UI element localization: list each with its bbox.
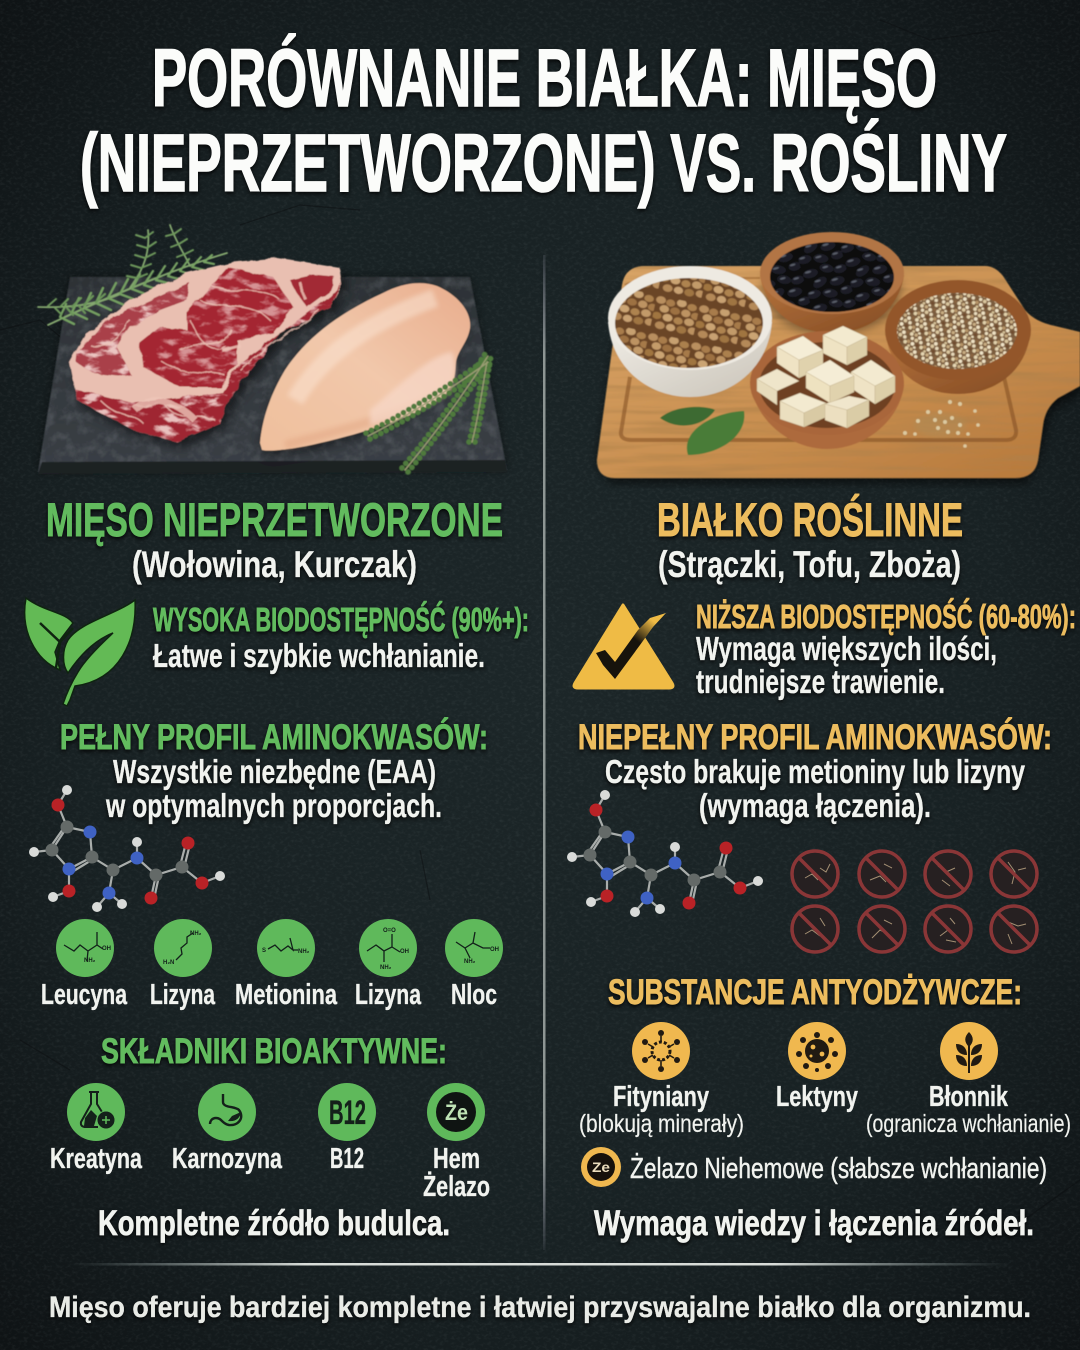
amino: nloc: Nloc bbox=[451, 979, 497, 1011]
text: high bioavailability: WYSOKA BIODOSTĘPNOŚĆ (90%+): bbox=[153, 601, 529, 638]
text: full amino profile bbox=[60, 717, 488, 824]
amino: lysine: H₂N bbox=[163, 960, 174, 966]
heading: unprocessed meat: MIĘSO NIEPRZETWORZONE bbox=[46, 493, 503, 546]
text: incomplete amino profile bbox=[578, 717, 1052, 824]
rosemary bbox=[38, 225, 227, 325]
icon: warning triangle with check bbox=[574, 605, 673, 688]
panel: meat bbox=[25, 225, 529, 1243]
amino: second lysine: Lizyna bbox=[355, 979, 422, 1011]
scattered seeds bbox=[903, 400, 980, 448]
text: full amino profile: PEŁNY PROFIL AMINOKWASÓW: bbox=[60, 717, 488, 757]
anti-nutrient: lectins bbox=[776, 1022, 858, 1113]
bioactive: creatine bbox=[50, 1083, 143, 1175]
heading: plant protein: BIAŁKO ROŚLINNE bbox=[657, 493, 963, 546]
amino: second lysine: OH bbox=[400, 949, 409, 955]
amino: lysine bbox=[150, 919, 216, 1011]
prohibited amino acids grid bbox=[792, 851, 1037, 952]
amino: methionine: S bbox=[262, 948, 266, 954]
amino: second lysine bbox=[355, 919, 422, 1011]
amino: lysine: Lizyna bbox=[150, 979, 216, 1011]
bioactive: heme iron: Żelazo bbox=[423, 1171, 490, 1203]
heading: bioactive: SKŁADNIKI BIOAKTYWNE: bbox=[101, 1032, 447, 1071]
image: plant foods on cutting board bbox=[597, 232, 1080, 483]
heading: plant protein: (Strączki, Tofu, Zboża) bbox=[658, 544, 961, 585]
text: high bioavailability bbox=[153, 601, 529, 674]
amino: leucine bbox=[41, 919, 128, 1011]
anti-nutrient: fiber bbox=[866, 1022, 1071, 1138]
amino: methionine: Metionina bbox=[235, 979, 338, 1011]
bioactive: heme iron: Że bbox=[445, 1100, 468, 1125]
amino: second lysine: NH₂ bbox=[380, 965, 392, 971]
anti-nutrient: phytates bbox=[579, 1022, 744, 1138]
quinoa bowl bbox=[886, 335, 1030, 394]
anti-nutrient: phytates: Fityniany bbox=[613, 1081, 709, 1113]
black beans bowl bbox=[764, 246, 900, 334]
bioactive: B12 bbox=[318, 1083, 376, 1175]
heading: unprocessed meat bbox=[46, 493, 503, 585]
bioactive: heme iron: Hem bbox=[433, 1143, 480, 1175]
amino: lysine: NH₂ bbox=[190, 931, 202, 937]
text: lower bioavailability: trudniejsze trawienie. bbox=[696, 663, 945, 700]
bioactive: B12: B12 bbox=[330, 1143, 364, 1175]
non-heme iron row bbox=[581, 1147, 1047, 1187]
text: high bioavailability: Łatwe i szybkie wchłanianie. bbox=[153, 637, 485, 674]
amino: leucine: Leucyna bbox=[41, 979, 128, 1011]
amino: second lysine: O=O bbox=[383, 928, 396, 934]
tofu bowl bbox=[751, 385, 904, 449]
bioactive: creatine: Kreatyna bbox=[50, 1143, 143, 1175]
text: full amino profile: Wszystkie niezbędne (EAA) bbox=[113, 753, 436, 790]
title bbox=[80, 33, 1007, 209]
horizontal divider bbox=[70, 1263, 1010, 1266]
leaves bbox=[660, 407, 715, 426]
non-heme iron row: Ze bbox=[592, 1159, 610, 1175]
steak bbox=[74, 264, 346, 448]
panel: plants bbox=[567, 232, 1080, 1243]
icon: green leaves bbox=[25, 598, 135, 706]
anti-nutrient: lectins: Lektyny bbox=[776, 1081, 858, 1113]
bioactive items bbox=[50, 1083, 490, 1203]
bioactive: carnosine: Karnozyna bbox=[172, 1143, 283, 1175]
bioactive: heme iron bbox=[423, 1083, 490, 1203]
amino: methionine bbox=[235, 919, 338, 1011]
amino: nloc: OH bbox=[490, 947, 499, 953]
thyme bbox=[366, 354, 491, 472]
molecule bbox=[567, 790, 763, 917]
tofu cubes bbox=[757, 326, 895, 428]
amino: leucine: NH₂ bbox=[84, 958, 96, 964]
lentil bowl bbox=[608, 322, 772, 397]
heading: unprocessed meat: (Wołowina, Kurczak) bbox=[132, 544, 417, 585]
anti-nutrient: phytates: (blokują minerały) bbox=[579, 1110, 744, 1138]
heading: plant protein bbox=[657, 493, 963, 585]
bioactive: carnosine bbox=[172, 1083, 283, 1175]
anti-nutrient items bbox=[579, 1022, 1071, 1138]
text: full amino profile: w optymalnych proporcjach. bbox=[105, 787, 442, 824]
vertical divider bbox=[543, 255, 546, 1250]
conclusion: meat: Kompletne źródło budulca. bbox=[98, 1204, 450, 1243]
amino: methionine: NH₂ bbox=[298, 949, 310, 955]
molecule bbox=[29, 785, 225, 912]
amino acids row bbox=[41, 919, 503, 1011]
amino: leucine: OH bbox=[102, 946, 111, 952]
text: incomplete amino profile: (wymaga łączenia). bbox=[699, 787, 931, 824]
anti-nutrient: fiber: Błonnik bbox=[929, 1081, 1009, 1113]
image: meat on slate board bbox=[38, 225, 507, 474]
amino: nloc: NH₂ bbox=[464, 959, 476, 965]
text: lower bioavailability bbox=[696, 598, 1076, 700]
chicken bbox=[258, 289, 468, 456]
bioactive: B12: B12 bbox=[329, 1094, 366, 1132]
amino: nloc bbox=[445, 919, 503, 1011]
